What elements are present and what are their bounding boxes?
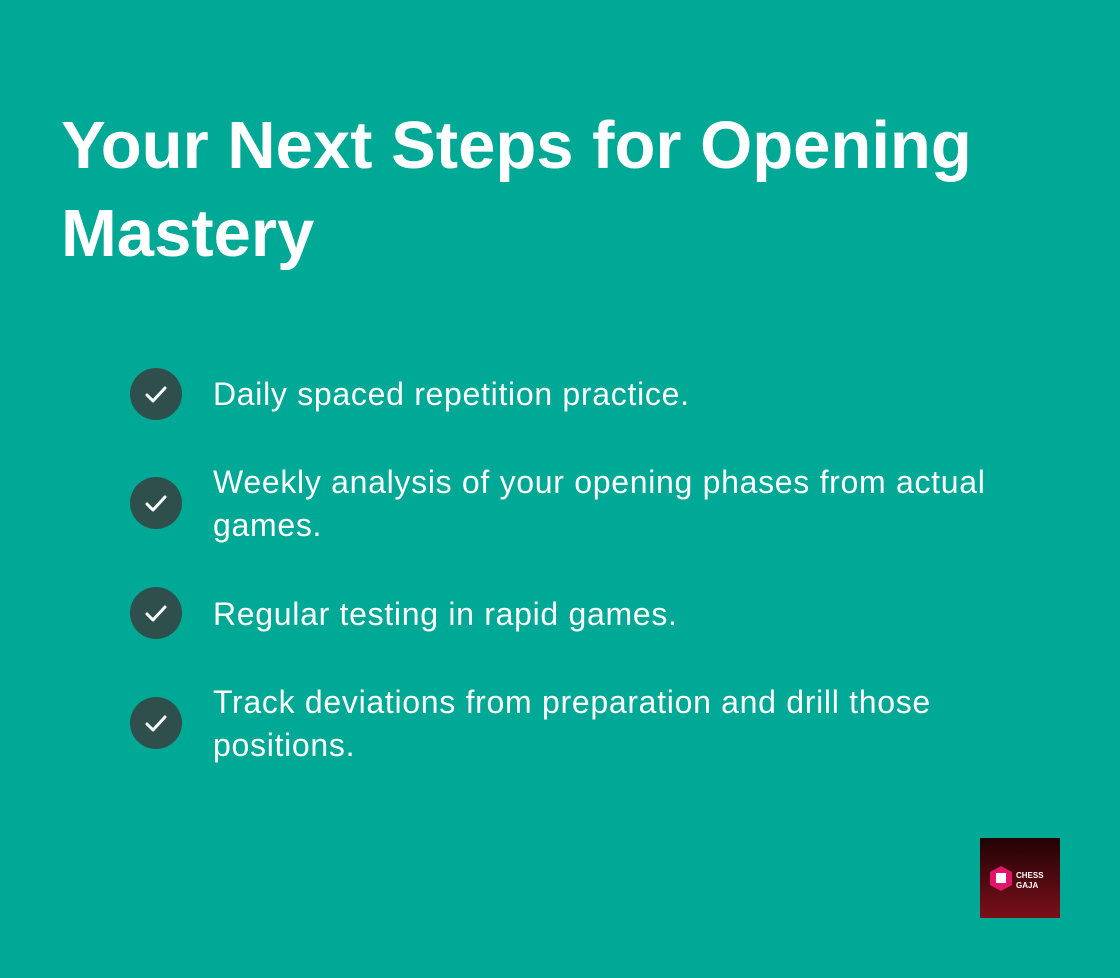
text: Track deviations from preparation and drill those positions.	[213, 684, 931, 763]
item 1	[130, 368, 690, 420]
item 2	[130, 464, 986, 543]
icon: check	[130, 477, 182, 529]
text: Daily spaced repetition practice.	[213, 376, 690, 412]
icon: check	[130, 587, 182, 639]
text: Regular testing in rapid games.	[213, 596, 678, 632]
logo: CHESS	[1016, 871, 1044, 880]
text: Weekly analysis of your opening phases from actual games.	[213, 464, 986, 543]
item 4	[130, 684, 931, 763]
icon: check	[130, 697, 182, 749]
icon: check	[130, 368, 182, 420]
logo	[980, 838, 1060, 918]
item 3	[130, 587, 678, 639]
title: Your Next Steps for Opening Mastery	[61, 108, 972, 271]
logo: GAJA	[1016, 881, 1038, 890]
